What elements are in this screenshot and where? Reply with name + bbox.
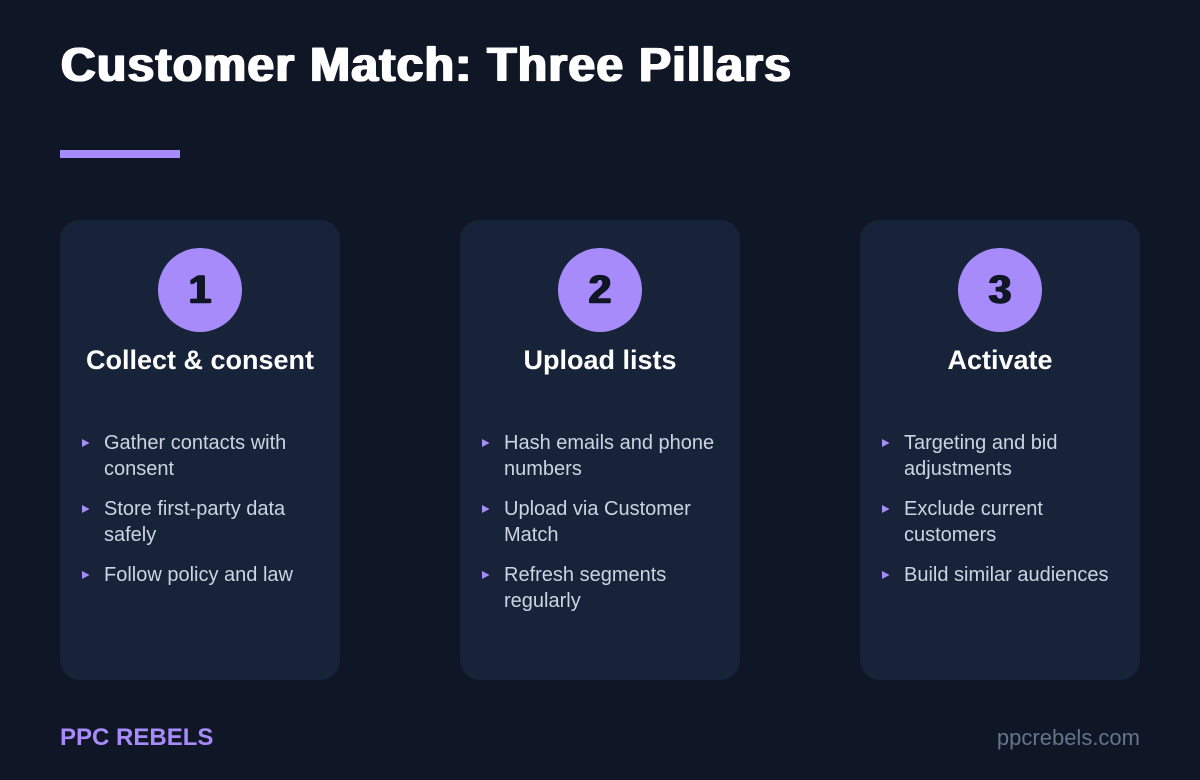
bullet list: collect and consent: [82, 432, 293, 586]
bullet list: upload lists: [482, 432, 714, 612]
bullet list: activate: [882, 432, 1109, 586]
bullet: upload: Upload via Customer Match: [504, 498, 691, 546]
bullet: follow policy: Follow policy and law: [104, 564, 293, 586]
bullet: store data: Store first-party data safely: [104, 498, 285, 546]
title: Customer Match: Three Pillars: [61, 39, 792, 92]
panel heading: activate: Activate: [947, 345, 1053, 375]
panel heading: collect and consent: Collect & consent: [86, 345, 314, 375]
bullet: hash emails: Hash emails and phone numbers: [504, 432, 714, 480]
bullet: gather contacts: Gather contacts with consent: [104, 432, 286, 480]
panel: collect and consent: [60, 220, 340, 680]
accent rule: [60, 150, 180, 158]
panel heading: upload lists: Upload lists: [523, 345, 677, 375]
footer website: ppcrebels.com: [997, 725, 1140, 750]
footer brand: PPC REBELS: [60, 724, 213, 751]
number badge 1: [158, 248, 242, 332]
panel: activate: [860, 220, 1140, 680]
number badge 2: 2: [589, 268, 611, 312]
bullet: exclude: Exclude current customers: [904, 498, 1043, 546]
number badge 1: 1: [189, 268, 211, 312]
bullet: refresh: Refresh segments regularly: [504, 564, 666, 612]
number badge 3: [958, 248, 1042, 332]
bullet: targeting: Targeting and bid adjustments: [904, 432, 1057, 480]
bullet: similar audiences: Build similar audiences: [904, 564, 1109, 586]
panel: upload lists: [460, 220, 740, 680]
number badge 2: [558, 248, 642, 332]
number badge 3: 3: [989, 268, 1011, 312]
